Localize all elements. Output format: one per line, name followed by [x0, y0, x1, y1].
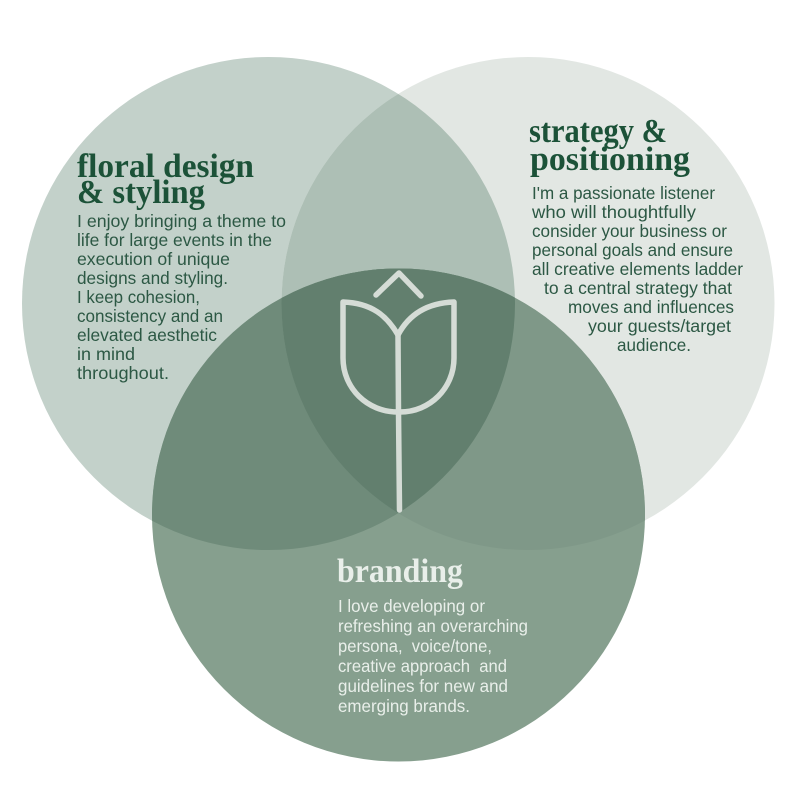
- icon: tulip: [343, 273, 454, 510]
- text: floral design description: throughout.: [77, 363, 169, 383]
- text: floral design description: consistency and an: [77, 306, 223, 326]
- text: branding description: [338, 596, 528, 716]
- text: strategy description: to a central strategy that: [544, 278, 732, 298]
- heading: strategy & positioning: [529, 113, 690, 178]
- text: strategy description: personal goals and ensure: [532, 240, 733, 260]
- heading: strategy & positioning: strategy &: [529, 113, 667, 150]
- text: floral design description: I keep cohesion,: [77, 287, 200, 307]
- circle: floral design: [22, 57, 515, 550]
- text: strategy description: consider your business or: [532, 221, 727, 241]
- text: strategy description: audience.: [617, 335, 691, 355]
- text: floral design description: elevated aesthetic: [77, 325, 217, 345]
- heading: strategy & positioning: positioning: [530, 141, 690, 178]
- overlap: floral and branding: [152, 298, 398, 550]
- heading: floral design & styling: & styling: [77, 174, 205, 211]
- text: branding description: refreshing an overarching: [338, 616, 528, 636]
- text: branding description: persona, voice/tone,: [338, 636, 492, 656]
- text: strategy description: [531, 183, 743, 355]
- overlap: centre of all three circles: [282, 268, 515, 513]
- text: strategy description: all creative elements ladder: [532, 259, 743, 279]
- text: floral design description: life for large events in the: [77, 230, 272, 250]
- overlap: floral and strategy: [282, 94, 515, 298]
- text: branding description: emerging brands.: [338, 696, 470, 716]
- text: strategy description: your guests/target: [588, 316, 731, 336]
- text: strategy description: moves and influences: [568, 297, 734, 317]
- text: branding description: I love developing or: [338, 596, 485, 616]
- circle: strategy and positioning: [282, 57, 774, 550]
- text: branding description: creative approach and: [338, 656, 507, 676]
- text: floral design description: I enjoy bringing a theme to: [77, 211, 286, 231]
- heading: floral design & styling: floral design: [77, 148, 254, 185]
- text: strategy description: who will thoughtfully: [531, 202, 696, 222]
- text: branding description: guidelines for new and: [338, 676, 508, 696]
- text: floral design description: in mind: [77, 344, 135, 364]
- heading: branding: branding: [337, 553, 463, 590]
- circle: branding: [152, 268, 645, 762]
- overlap: strategy and branding: [515, 298, 645, 520]
- text: strategy description: I'm a passionate listener: [532, 183, 715, 203]
- text: floral design description: designs and styling.: [77, 268, 228, 288]
- heading: floral design & styling: [77, 148, 254, 211]
- text: floral design description: execution of unique: [77, 249, 230, 269]
- text: floral design description: [77, 211, 286, 383]
